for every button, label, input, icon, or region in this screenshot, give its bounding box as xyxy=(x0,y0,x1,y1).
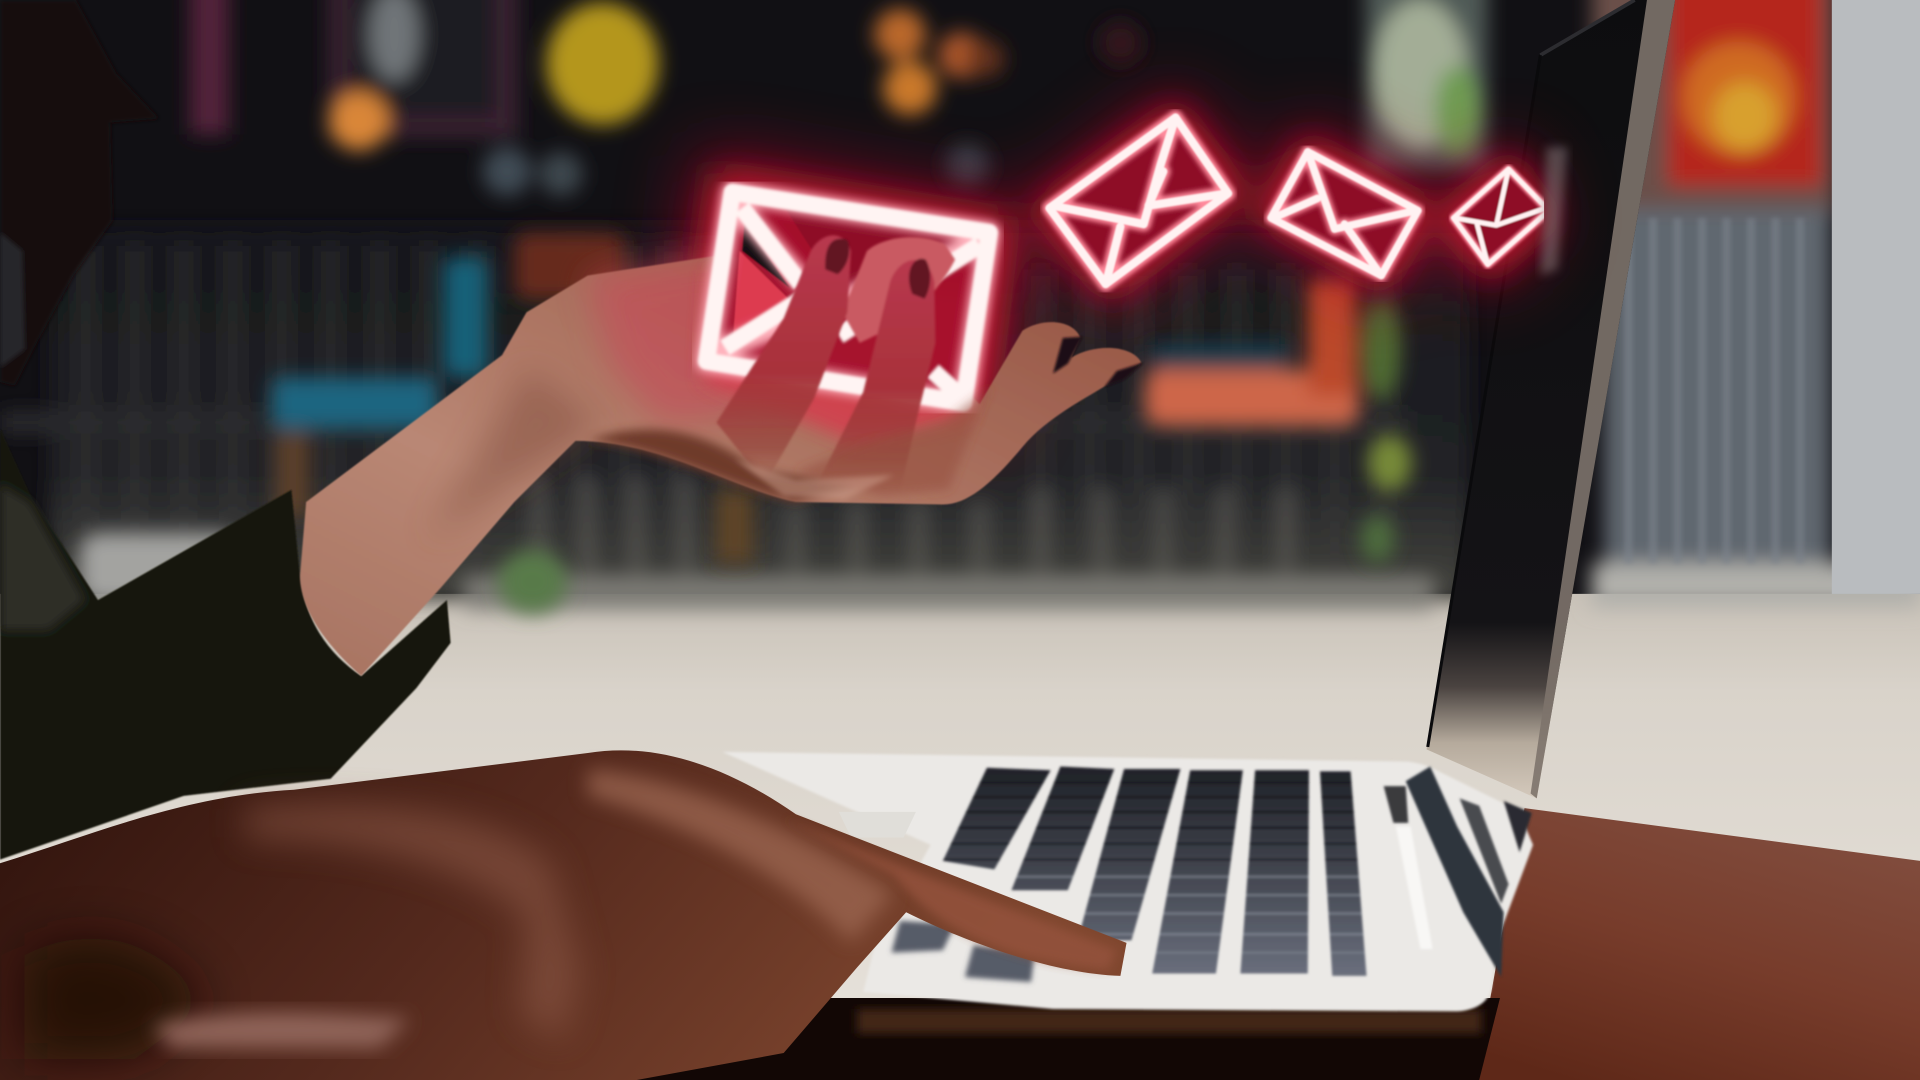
middle fingernail xyxy=(909,259,930,299)
keys behind typing finger xyxy=(891,921,1035,982)
shadow below laptop xyxy=(73,998,1500,1080)
raised hand: arm and palm xyxy=(300,255,1141,676)
back finger xyxy=(842,237,955,343)
typing hand xyxy=(0,750,1127,1080)
typing hand silhouette xyxy=(0,750,1127,1080)
background: right building wall and poster xyxy=(1592,0,1920,607)
sleeve xyxy=(0,429,451,860)
large envelope xyxy=(707,192,989,403)
screen reflection beside envelope 4 xyxy=(1540,147,1567,276)
laptop screen xyxy=(1427,0,1675,798)
finger highlights xyxy=(245,804,582,1041)
trackpad xyxy=(839,812,916,838)
background: fence xyxy=(0,227,1469,610)
hair xyxy=(0,0,159,386)
floating envelope 4 xyxy=(1453,169,1549,264)
floating envelope 2 xyxy=(1049,118,1228,284)
fingers in front of envelope xyxy=(716,235,1144,500)
background: pale object behind sleeve xyxy=(80,533,239,604)
envelope fill xyxy=(707,192,989,403)
little fingernail xyxy=(1104,362,1144,387)
middle finger xyxy=(814,260,936,492)
index fingernail xyxy=(825,239,849,274)
keyboard xyxy=(891,767,1371,982)
palm red reflection xyxy=(704,269,980,443)
red glow behind envelopes xyxy=(673,92,1545,435)
laptop xyxy=(637,0,1676,1080)
ring fingernail xyxy=(1053,337,1082,373)
cuff reflection on table xyxy=(153,1012,410,1048)
index finger xyxy=(716,235,851,484)
envelope neon outline xyxy=(707,192,989,403)
background: ground xyxy=(0,594,1920,1080)
laptop base xyxy=(722,752,1533,1011)
floating envelope 3 xyxy=(1271,152,1418,276)
background: shop lights and signs xyxy=(190,0,1488,613)
hinge and side ports xyxy=(1384,767,1532,977)
table xyxy=(1476,808,1920,1080)
